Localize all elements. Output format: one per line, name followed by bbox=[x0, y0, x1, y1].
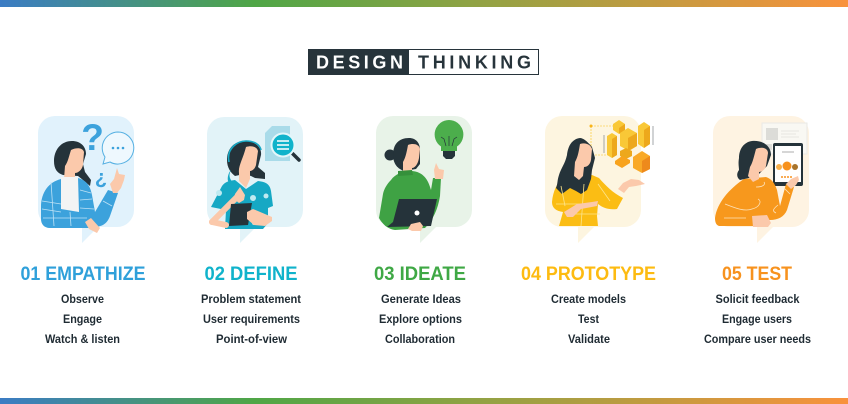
column: 05 test bbox=[704, 264, 811, 346]
column: 03 ideate: Explore options bbox=[379, 312, 462, 326]
column: 03 ideate: 03 IDEATE bbox=[374, 264, 466, 285]
column: 01 empathize: Engage bbox=[63, 312, 102, 326]
column: 02 define: User requirements bbox=[203, 312, 300, 326]
panel: ideate illustration bbox=[376, 116, 472, 243]
column: 02 define: 02 DEFINE bbox=[204, 264, 298, 285]
column: 01 empathize: Observe bbox=[61, 292, 104, 306]
panel: prototype illustration bbox=[545, 116, 653, 243]
column: 01 empathize: 01 EMPATHIZE bbox=[20, 264, 146, 285]
column: 04 prototype: Create models bbox=[551, 292, 626, 306]
title: DESIGN bbox=[316, 52, 403, 72]
column: 04 prototype: 04 PROTOTYPE bbox=[521, 264, 656, 285]
column: 03 ideate: Collaboration bbox=[385, 332, 455, 346]
woman with headset and tablet bbox=[211, 141, 273, 229]
woman with long hair and plaid shirt bbox=[552, 138, 645, 226]
icon: tablet with rating bbox=[773, 143, 803, 186]
bottom gradient bar bbox=[0, 398, 848, 404]
column: 02 define bbox=[201, 264, 301, 346]
icon: document with magnifier bbox=[265, 126, 299, 161]
column: 03 ideate: Generate Ideas bbox=[381, 292, 461, 306]
column: 01 empathize bbox=[20, 264, 146, 346]
icon: web page card bbox=[762, 123, 807, 154]
column: 04 prototype bbox=[521, 264, 656, 346]
woman with orange sweater bbox=[715, 141, 799, 227]
icon: question mark: ? bbox=[81, 117, 104, 158]
column: 03 ideate bbox=[374, 264, 466, 346]
panel: test illustration bbox=[713, 116, 809, 243]
icon: light bulb bbox=[435, 120, 463, 159]
icon: speech bubble bbox=[102, 132, 134, 164]
column: 05 test: 05 TEST bbox=[722, 264, 792, 285]
woman with laptop bbox=[379, 138, 444, 231]
column: 01 empathize: Watch & listen bbox=[45, 332, 120, 346]
column: 05 test: Engage users bbox=[722, 312, 792, 326]
icon: inverted question mark: ¿ bbox=[95, 167, 107, 189]
top gradient bar bbox=[0, 0, 848, 7]
title bbox=[308, 49, 538, 75]
column: 04 prototype: Validate bbox=[568, 332, 610, 346]
column: 02 define: Point-of-view bbox=[216, 332, 288, 346]
icon: yellow blocks bbox=[590, 120, 653, 173]
column: 05 test: Solicit feedback bbox=[716, 292, 800, 306]
column: 04 prototype: Test bbox=[578, 312, 599, 326]
woman with striped sweater bbox=[41, 141, 125, 233]
panel: define illustration bbox=[207, 117, 303, 243]
title: THINKING bbox=[418, 52, 531, 72]
panel: empathize illustration bbox=[38, 116, 134, 243]
column: 05 test: Compare user needs bbox=[704, 332, 811, 346]
column: 02 define: Problem statement bbox=[201, 292, 301, 306]
